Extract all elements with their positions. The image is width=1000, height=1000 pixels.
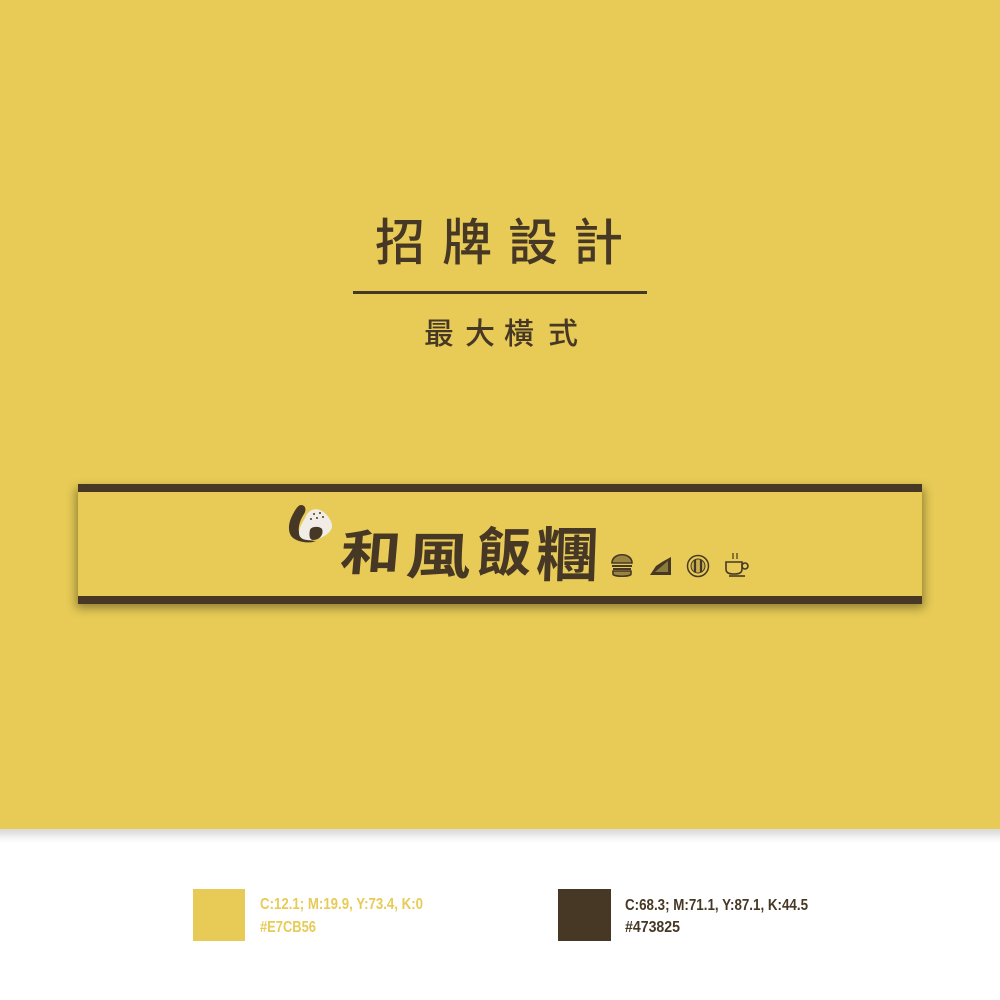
- color values: brown: [625, 897, 808, 936]
- icon: onigiri logo: [289, 505, 332, 542]
- signboard top band: [78, 484, 922, 492]
- color values: brown: C:68.3; M:71.1, Y:87.1, K:44.5: [625, 897, 808, 914]
- logo wordmark: 飯: [475, 524, 533, 583]
- logo wordmark: 和: [338, 526, 404, 581]
- color values: brown: #473825: [625, 919, 680, 936]
- color swatch: brown: [558, 889, 808, 941]
- icon: burger: [612, 555, 632, 576]
- icon: coffee cup: [726, 553, 748, 576]
- subheading: 最大橫式: [424, 318, 578, 351]
- logo wordmark: [338, 522, 599, 589]
- heading: title: 招牌設計: [375, 215, 623, 271]
- logo wordmark: 風: [404, 530, 472, 585]
- signboard shadow: [76, 488, 924, 608]
- color values: yellow: #E7CB56: [260, 919, 316, 936]
- logo wordmark: 糰: [535, 522, 599, 589]
- divider under title: [353, 291, 647, 294]
- signboard face: [78, 484, 922, 604]
- color values: yellow: [260, 896, 423, 936]
- icon: sandwich: [650, 557, 671, 575]
- signboard bottom band: [78, 596, 922, 604]
- panel: signboard: [76, 484, 924, 608]
- color values: yellow: C:12.1; M:19.9, Y:73.4, K:0: [260, 896, 423, 913]
- icon: plate and cutlery: [688, 556, 708, 576]
- footer top shadow: [0, 824, 1000, 834]
- color swatch: yellow: [193, 889, 423, 941]
